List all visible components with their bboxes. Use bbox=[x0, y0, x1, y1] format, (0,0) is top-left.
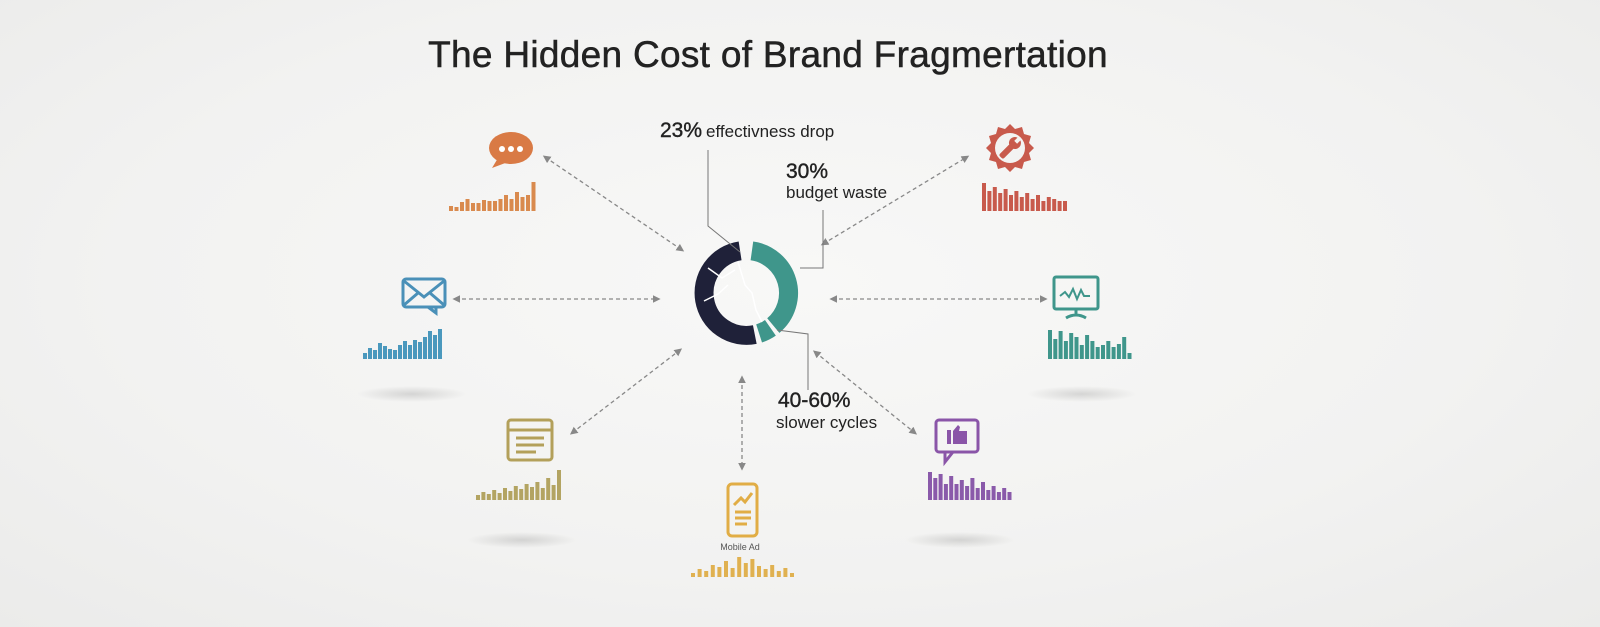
bars: purple bbox=[928, 472, 1012, 500]
bars: red bbox=[982, 183, 1067, 211]
icon: gear wrench bbox=[986, 124, 1034, 172]
icon: monitor bbox=[1054, 277, 1098, 318]
stat: 30%: budget waste bbox=[786, 183, 887, 202]
stat: 23%: 23%effectivness drop bbox=[660, 119, 834, 142]
bars: olive bbox=[476, 470, 561, 500]
donut chart bbox=[704, 251, 789, 335]
stat: 40-60% bbox=[776, 389, 877, 432]
icon: envelope bbox=[403, 279, 445, 313]
title: The Hidden Cost of Brand Fragmertation bbox=[428, 34, 1108, 75]
bars: blue bbox=[363, 329, 442, 359]
icon: browser bbox=[508, 420, 552, 460]
bars: orange bbox=[449, 182, 536, 211]
arrows bbox=[455, 157, 1045, 468]
icon: like bbox=[936, 420, 978, 462]
stat: 40-60%: slower cycles bbox=[776, 413, 877, 432]
icon: phone bbox=[728, 484, 757, 536]
icon: chat bbox=[489, 132, 533, 168]
bars: gold bbox=[691, 557, 794, 577]
shadows bbox=[357, 386, 1137, 548]
bars: teal bbox=[1048, 330, 1132, 359]
label: Mobile Ad: Mobile Ad bbox=[720, 542, 760, 552]
stat: 30% bbox=[786, 160, 887, 202]
callout lines bbox=[708, 150, 823, 390]
stat: 40-60%: 40-60% bbox=[778, 389, 850, 412]
stat: 30%: 30% bbox=[786, 160, 828, 183]
